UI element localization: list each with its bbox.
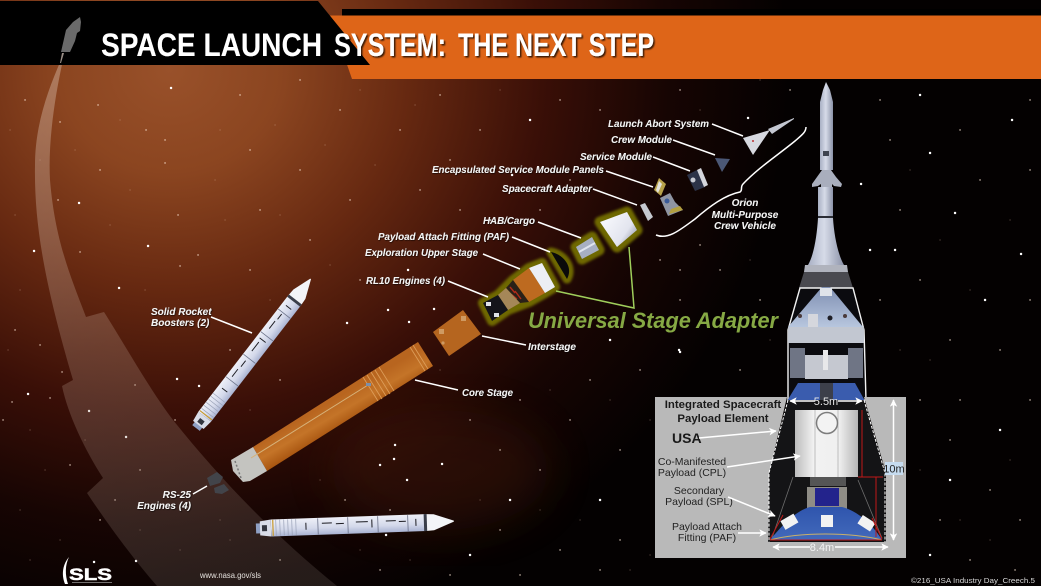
label: orion multi-purpose crew vehicle: Multi-Purpose — [712, 210, 779, 221]
label: orion multi-purpose crew vehicle: Crew Vehicle — [714, 221, 776, 232]
exploration upper stage glow and stage — [483, 263, 555, 321]
stack: ogive fairing — [808, 218, 844, 265]
label: payload attach fitting: Payload Attach Fitting (PAF) — [378, 232, 510, 243]
panel heading: Integrated Spacecraft — [665, 399, 781, 411]
label: payload attach fitting: Fitting (PAF) — [678, 532, 736, 544]
header bars — [0, 1, 1041, 79]
service module — [687, 168, 708, 191]
label: spacecraft adapter: Spacecraft Adapter — [502, 184, 593, 195]
red dimension lines — [770, 410, 883, 540]
payload attach fitting — [551, 252, 569, 279]
core stage — [231, 342, 433, 482]
universal stage adapter callout lines — [556, 247, 634, 308]
stack: jettison motor — [812, 170, 842, 188]
fairing interior — [768, 400, 886, 542]
co-manifested payload cylinder — [795, 410, 858, 486]
label: secondary payload — [665, 485, 775, 516]
payload attach fitting dome — [770, 507, 882, 540]
label: co-manifested payload — [658, 456, 800, 479]
label: crew module: Crew Module — [611, 135, 672, 146]
label: secondary payload: Secondary — [674, 485, 724, 497]
8.4m dimension arrow — [773, 542, 888, 554]
stack: upper column — [818, 187, 833, 218]
header: orange title band — [330, 16, 1041, 79]
stack: blue adapter — [787, 383, 865, 401]
8.4m dimension arrow: 8.4m — [810, 542, 834, 554]
leader lines — [193, 124, 743, 494]
stack: abort tower — [820, 82, 833, 170]
launch trajectory swoosh — [35, 60, 337, 586]
label: hab/cargo: HAB/Cargo — [483, 216, 535, 227]
5.5m dimension arrow: 5.5m — [814, 396, 838, 408]
title: THE NEXT STEP — [458, 27, 654, 63]
header: black title band — [0, 1, 370, 65]
universal stage adapter label: Universal Stage Adapter — [528, 308, 779, 333]
label: secondary payload: Payload (SPL) — [665, 496, 733, 508]
label: interstage: Interstage — [528, 342, 576, 353]
stack: service module — [805, 355, 848, 379]
SLS logo — [63, 557, 112, 584]
label: usa — [672, 430, 776, 446]
label: solid rocket boosters: Solid Rocket — [151, 307, 212, 318]
crew module — [715, 158, 730, 172]
solid rocket booster, angled — [190, 274, 317, 433]
document reference: ©216_USA Industry Day_Creech.5 — [911, 576, 1035, 585]
icon: rocket logo — [60, 17, 81, 63]
secondary payload — [807, 487, 847, 509]
panel heading: Payload Element — [677, 413, 769, 425]
title: SYSTEM: — [334, 27, 446, 63]
panel: grey background — [655, 397, 906, 558]
label: co-manifested payload: Payload (CPL) — [658, 467, 726, 479]
label: co-manifested payload: Co-Manifested — [658, 456, 726, 468]
stack: outer fairing with crew module — [788, 288, 866, 400]
label: launch abort system: Launch Abort System — [608, 119, 709, 130]
10m dimension arrow — [883, 400, 905, 540]
orion bracket — [656, 127, 806, 236]
label: core stage: Core Stage — [462, 388, 513, 399]
component labels — [137, 119, 779, 512]
spacecraft adapter — [640, 203, 653, 221]
label: usa: USA — [672, 430, 702, 446]
5.5m dimension arrow — [790, 396, 862, 408]
solid rocket booster, horizontal — [256, 513, 454, 537]
label: rs-25 engines: RS-25 — [163, 490, 191, 501]
RS-25 engines — [207, 472, 229, 494]
label: payload attach fitting: Payload Attach — [672, 521, 742, 533]
universal stage adapter cone — [600, 212, 637, 247]
label: exploration upper stage: Exploration Upper Stage — [365, 248, 478, 259]
10m dimension arrow: 10m — [883, 464, 905, 476]
SLS logo: SLS — [69, 565, 112, 584]
panel: integrated spacecraft payload element — [655, 396, 906, 558]
label: payload attach fitting — [672, 521, 766, 544]
label: rs-25 engines: Engines (4) — [137, 501, 192, 512]
interstage — [433, 310, 481, 356]
label: orion multi-purpose crew vehicle: Orion — [732, 198, 758, 209]
title: SPACE LAUNCH — [101, 27, 322, 63]
encapsulated service module panels — [654, 178, 683, 216]
title — [101, 27, 654, 63]
label: encapsulated service module panels: Encapsulated Service Module Panels — [432, 165, 604, 176]
label: service module: Service Module — [580, 152, 652, 163]
website url: www.nasa.gov/sls — [199, 571, 261, 580]
integrated stack rocket — [787, 82, 866, 401]
HAB/Cargo module — [576, 237, 599, 259]
header: black top stripe — [342, 9, 1041, 16]
launch abort system — [743, 118, 794, 155]
label: solid rocket boosters: Boosters (2) — [151, 318, 210, 329]
label: rl10 engines: RL10 Engines (4) — [366, 276, 446, 287]
